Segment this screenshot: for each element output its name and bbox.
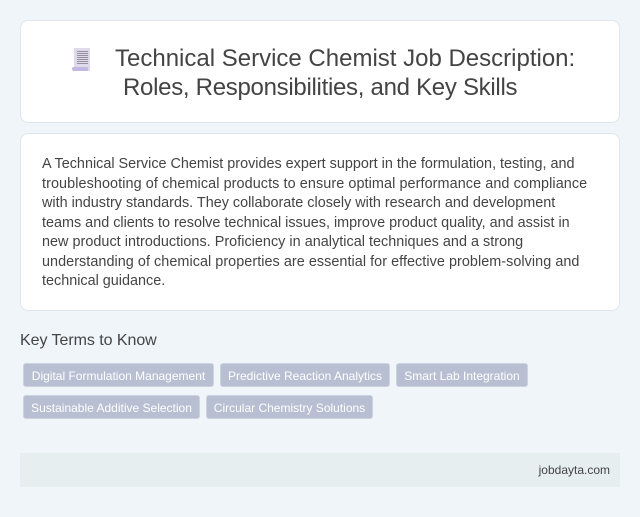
- tag: Circular Chemistry Solutions: [214, 401, 365, 415]
- tag: Smart Lab Integration: [404, 369, 520, 383]
- footer bar: [20, 453, 620, 487]
- title: Technical Service Chemist Job Description:: [115, 45, 575, 72]
- tag: [220, 363, 390, 387]
- text block: description: troubleshooting of chemical products to ensure optimal performance and compliance: [42, 176, 587, 192]
- tag: Digital Formulation Management: [32, 369, 205, 383]
- text block: description: technical guidance.: [42, 273, 165, 289]
- text block: description: understanding of chemical properties are essential for effective problem-solving and: [42, 254, 579, 270]
- tag: [23, 395, 200, 419]
- title: [115, 45, 575, 101]
- panel: description card: [20, 133, 620, 311]
- icon: document scroll: [72, 48, 90, 71]
- tag: Predictive Reaction Analytics: [228, 369, 382, 383]
- tag: Sustainable Additive Selection: [31, 401, 192, 415]
- tag: [23, 363, 214, 387]
- tag: [396, 363, 528, 387]
- text block: description: [42, 156, 587, 289]
- title: Roles, Responsibilities, and Key Skills: [123, 74, 517, 101]
- text block: description: A Technical Service Chemist provides expert support in the formulation, testing, and: [42, 156, 574, 172]
- tag: [206, 395, 373, 419]
- heading: key terms: Key Terms to Know: [20, 332, 157, 349]
- tag list: key terms: [23, 363, 528, 419]
- panel: title card: [20, 20, 620, 123]
- text block: description: new product introductions. Proficiency in analytical techniques and a strong: [42, 234, 523, 250]
- text block: description: teams and clients to resolve technical issues, improve product quality, and assist in: [42, 214, 570, 230]
- footer text: jobdayta.com: [539, 463, 610, 477]
- text block: description: with industry standards. They collaborate closely with research and development: [42, 195, 555, 211]
